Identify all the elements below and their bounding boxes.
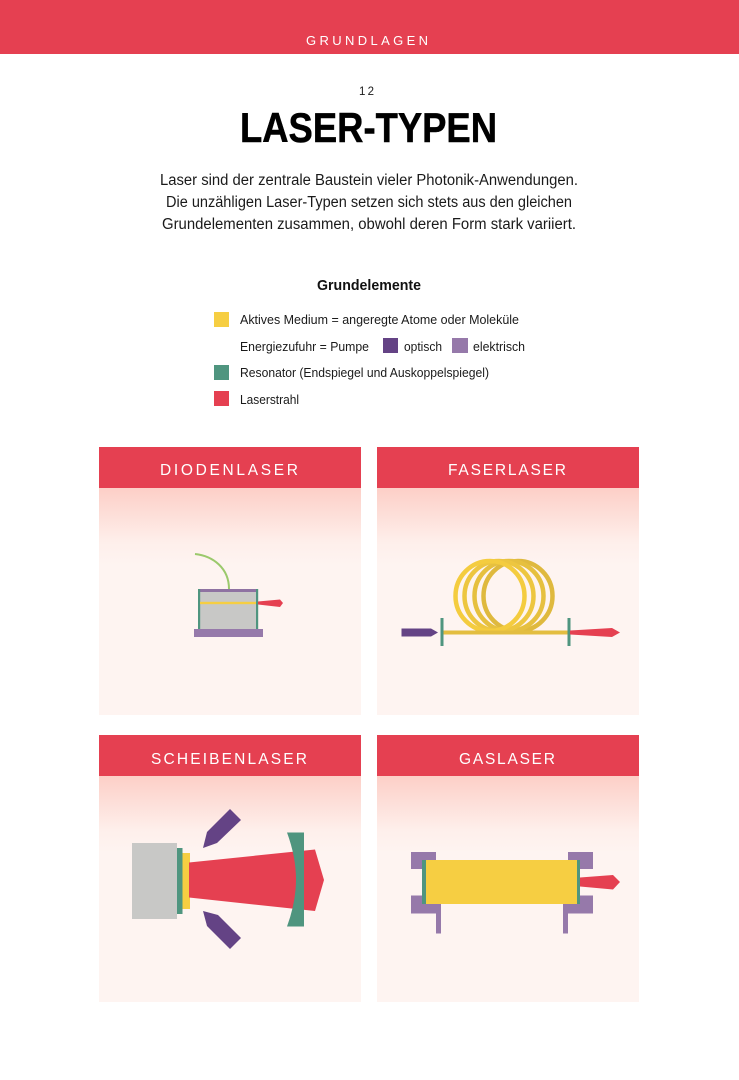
page number: 12 xyxy=(359,86,374,98)
legend: energy supply: elektrisch xyxy=(473,340,525,354)
panel: Scheibenlaser: SCHEIBENLASER xyxy=(151,751,307,768)
legend: resonator: Resonator (Endspiegel und Auskoppelspiegel) xyxy=(240,366,489,380)
intro paragraph: Grundelementen zusammen, obwohl deren Form stark variiert. xyxy=(162,216,576,233)
panel: Gaslaser: GASLASER xyxy=(459,751,555,768)
header band: GRUNDLAGEN xyxy=(306,33,428,48)
intro paragraph: Die unzähligen Laser-Typen setzen sich stets aus den gleichen xyxy=(166,194,572,211)
panel: Faserlaser: FASERLASER xyxy=(448,462,566,479)
legend heading: Grundelemente xyxy=(317,277,421,294)
fiber laser diagram xyxy=(402,561,620,646)
disk laser diagram xyxy=(132,809,324,949)
intro paragraph xyxy=(160,172,578,233)
panel: Diodenlaser: DIODENLASER xyxy=(160,462,298,479)
gas laser diagram xyxy=(411,852,620,934)
legend: laser beam xyxy=(214,391,299,407)
header band xyxy=(0,0,739,54)
legend xyxy=(214,312,525,407)
legend: energy supply: optisch xyxy=(404,340,442,354)
diode laser diagram xyxy=(194,554,283,637)
legend: energy supply xyxy=(240,338,525,354)
panel: Faserlaser xyxy=(377,447,639,715)
legend: energy supply: Energiezufuhr = Pumpe xyxy=(240,340,369,354)
panel: Diodenlaser xyxy=(99,447,361,715)
title: LASER-TYPEN xyxy=(240,104,497,151)
intro paragraph: Laser sind der zentrale Baustein vieler Photonik-Anwendungen. xyxy=(160,172,578,189)
panel: Scheibenlaser xyxy=(99,735,361,1002)
panel: Gaslaser xyxy=(377,735,639,1002)
legend: laser beam: Laserstrahl xyxy=(240,393,299,407)
legend: active medium: Aktives Medium = angeregte Atome oder Moleküle xyxy=(240,313,519,327)
